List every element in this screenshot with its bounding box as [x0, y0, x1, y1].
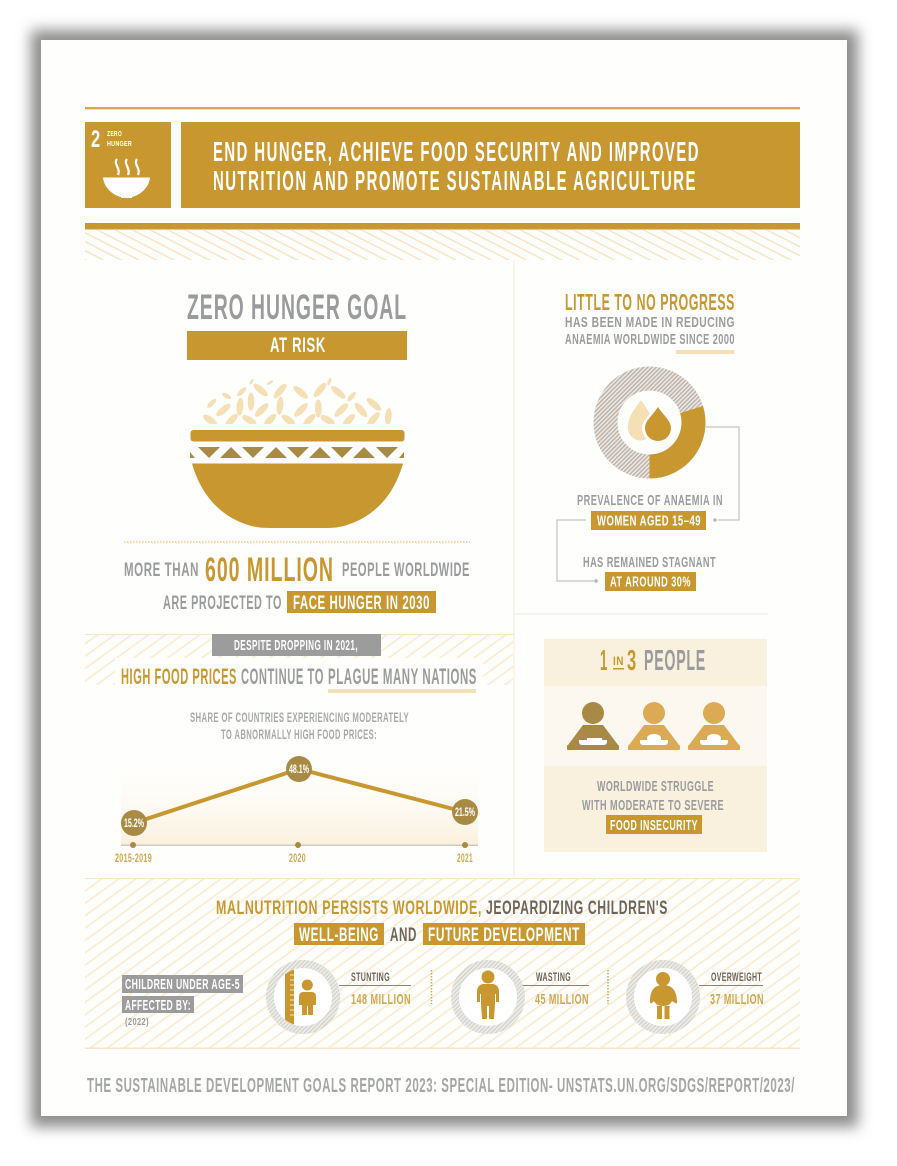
icon: person with food [688, 702, 740, 750]
donut chart [606, 378, 705, 478]
label: children under age 5: (2022) [125, 1017, 149, 1028]
text: food insecurity [582, 778, 724, 834]
line chart: 2021 [457, 851, 473, 865]
icon: blood drops [628, 400, 674, 444]
label: children under age 5: AFFECTED BY: [125, 998, 191, 1014]
line chart: 21.5% [455, 805, 475, 819]
text: more than 600 million [124, 551, 470, 614]
heading: zero hunger goal: ZERO HUNGER GOAL [187, 288, 407, 327]
text: stagnant [583, 554, 716, 591]
badge: at risk: AT RISK [270, 334, 326, 357]
banner: despite dropping: DESPITE DROPPING IN 2021, [234, 638, 358, 654]
heading: little to no progress: LITTLE TO NO PROGRESS [565, 289, 735, 315]
heading: high food prices: PLAGUE MANY NATIONS [328, 664, 477, 689]
icon: bowl of rice [190, 377, 404, 528]
label: children under age 5: CHILDREN UNDER AGE-5 [125, 977, 240, 993]
text: more than 600 million: PEOPLE WORLDWIDE [342, 560, 470, 581]
stat: stunting: 148 MILLION [351, 991, 411, 1008]
text: food insecurity: WITH MODERATE TO SEVERE [582, 797, 724, 814]
heading: malnutrition: MALNUTRITION PERSISTS WORLDWIDE, [216, 898, 482, 919]
stat: wasting [455, 964, 589, 1030]
text: more than 600 million: ARE PROJECTED TO [163, 593, 282, 614]
text: anaemia summary [565, 314, 735, 354]
panel: food prices [85, 634, 514, 865]
heading: malnutrition: FUTURE DEVELOPMENT [428, 925, 580, 946]
heading: malnutrition: WELL-BEING [299, 925, 379, 946]
heading: malnutrition [216, 898, 668, 946]
text: anaemia summary: ANAEMIA WORLDWIDE SINCE 2000 [565, 331, 735, 348]
heading: 1 in 3 people: 1 [600, 645, 608, 677]
stat: stunting [270, 964, 411, 1030]
text: more than 600 million: 600 MILLION [205, 551, 334, 589]
title banner [181, 122, 800, 208]
header [85, 107, 800, 260]
line chart: 2020 [289, 851, 306, 865]
heading: malnutrition: JEOPARDIZING CHILDREN'S [486, 898, 668, 919]
icon: SDG 2 tile: 2 [91, 126, 101, 153]
heading: 1 in 3 people [600, 645, 706, 677]
icon: overweight child [630, 964, 696, 1030]
stat: overweight: 37 MILLION [710, 991, 764, 1008]
text: prevalence [577, 492, 723, 530]
icon: SDG 2 tile [85, 122, 171, 208]
stat: overweight [630, 964, 764, 1030]
icon: wasted child [455, 964, 521, 1030]
stat: overweight: OVERWEIGHT [711, 972, 762, 984]
text: food insecurity: FOOD INSECURITY [610, 817, 698, 834]
text: anaemia summary: HAS BEEN MADE IN REDUCING [565, 314, 735, 331]
icon: SDG 2 tile: ZERO [107, 131, 122, 138]
icon: person with empty plate [567, 702, 619, 750]
heading: 1 in 3 people: 3 [627, 645, 637, 677]
stat: wasting: 45 MILLION [535, 991, 589, 1008]
text: stagnant: AT AROUND 30% [610, 574, 691, 590]
heading: high food prices: CONTINUE TO [241, 664, 324, 689]
line chart: 48.1% [289, 762, 309, 776]
text: food insecurity: WORLDWIDE STRUGGLE [597, 778, 714, 795]
panel: anaemia [557, 289, 739, 591]
line chart [115, 755, 478, 865]
text: chart subtitle: SHARE OF COUNTRIES EXPERIENCING MODERATELY [190, 710, 409, 725]
icon: person with food [628, 702, 680, 750]
stat: stunting: STUNTING [351, 972, 390, 984]
heading: high food prices [121, 664, 477, 693]
heading: malnutrition: AND [390, 925, 417, 946]
icon: stunted child with ruler [270, 964, 336, 1030]
heading: high food prices: HIGH FOOD PRICES [121, 664, 237, 689]
heading: 1 in 3 people: IN [613, 654, 624, 668]
stat: wasting: WASTING [536, 972, 571, 984]
line chart: 15.2% [124, 816, 144, 830]
icon: SDG 2 tile: HUNGER [107, 141, 132, 148]
panel: zero hunger goal [124, 288, 470, 614]
banner: despite dropping [212, 634, 381, 656]
line chart: 2015-2019 [115, 851, 152, 865]
panel: malnutrition [85, 878, 800, 1049]
text: prevalence: WOMEN AGED 15–49 [597, 512, 701, 530]
panel: 1 in 3 people: PEOPLE [644, 645, 706, 677]
text: chart subtitle [190, 710, 409, 742]
badge: at risk [187, 331, 407, 360]
panel: 1 in 3 people [544, 639, 767, 852]
label: children under age 5 [122, 975, 243, 1028]
text: more than 600 million: MORE THAN [124, 560, 199, 581]
text: prevalence: PREVALENCE OF ANAEMIA IN [577, 492, 723, 509]
text: stagnant: HAS REMAINED STAGNANT [583, 554, 716, 571]
text: chart subtitle: TO ABNORMALLY HIGH FOOD PRICES: [221, 727, 377, 742]
text: more than 600 million: FACE HUNGER IN 2030 [293, 593, 430, 614]
